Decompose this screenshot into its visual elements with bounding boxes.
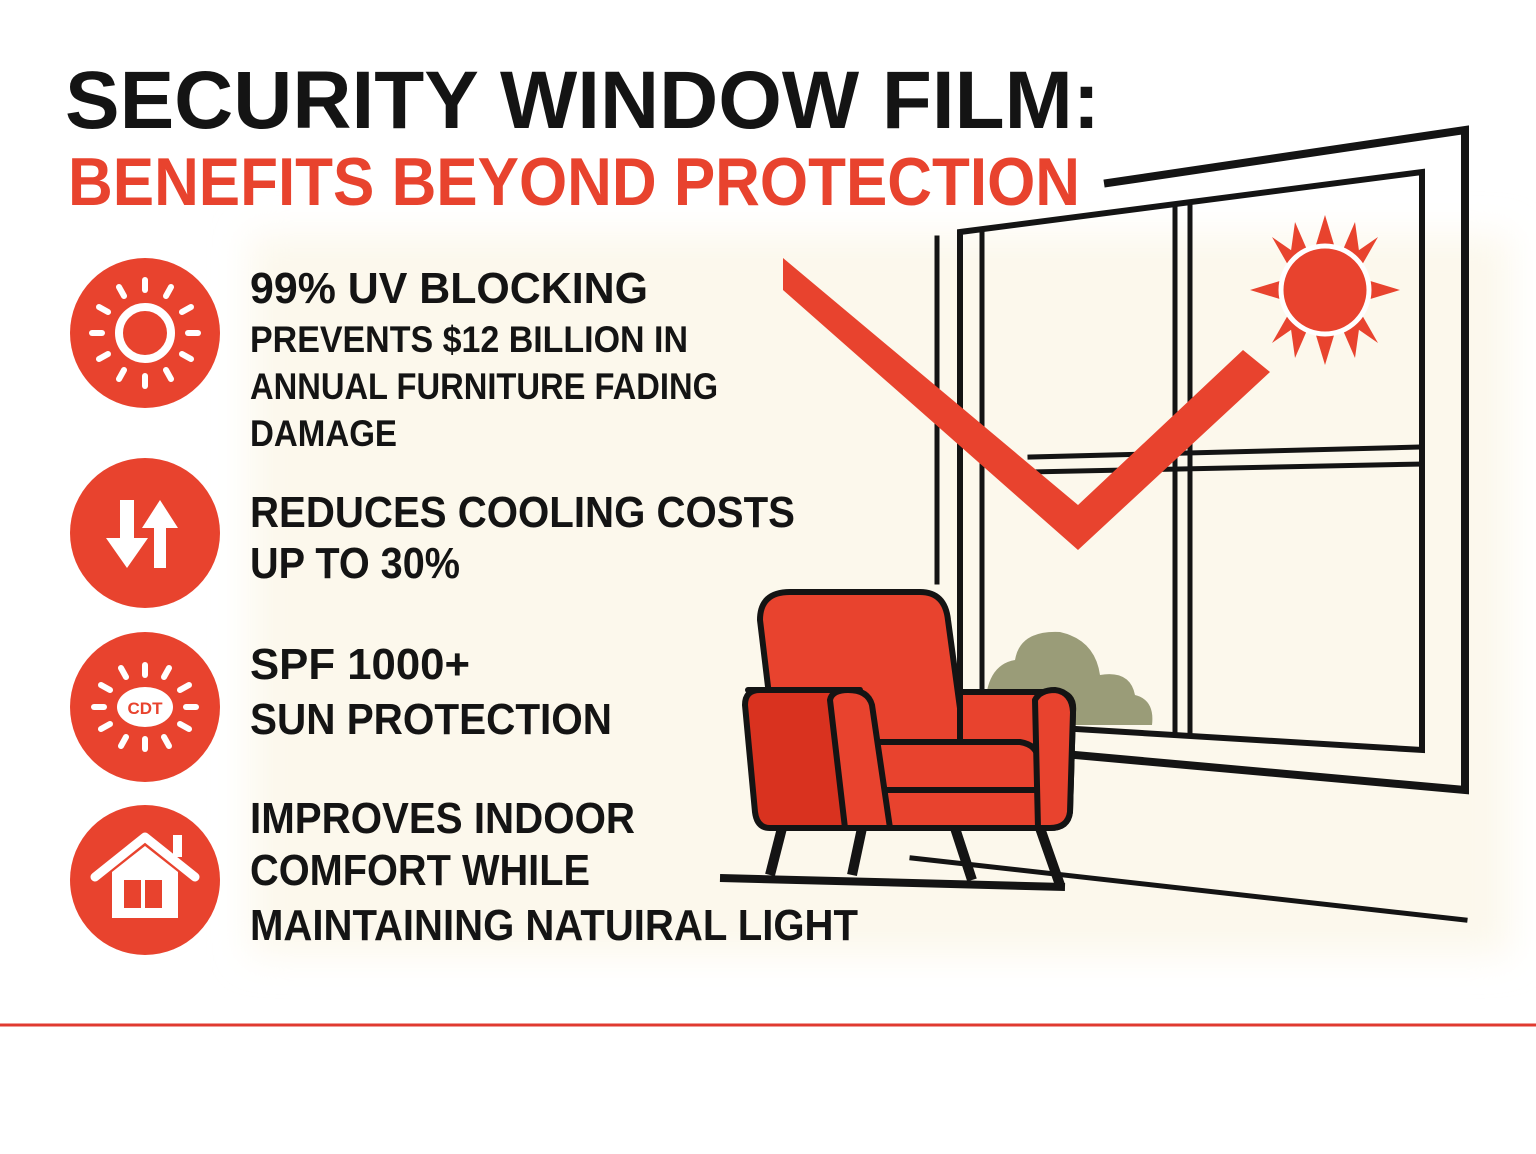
background cream panel (250, 235, 1510, 955)
text: SPF: SPF 1000+ (250, 640, 470, 689)
title: SECURITY WINDOW FILM: (65, 55, 1100, 146)
text: UV blocking: PREVENTS $12 BILLION IN (250, 319, 688, 360)
text: SPF (250, 640, 612, 744)
text: UV blocking: DAMAGE (250, 413, 397, 454)
title: BENEFITS BEYOND PROTECTION (68, 144, 1080, 220)
title (65, 55, 1100, 220)
icon: SPF sun: CDT (128, 699, 163, 718)
illustration: window (912, 130, 1465, 920)
icon: house (70, 805, 220, 955)
text: cooling: UP TO 30% (250, 539, 460, 588)
text: cooling: REDUCES COOLING COSTS (250, 488, 795, 537)
bottom red rule (0, 1024, 1536, 1026)
text: SPF: SUN PROTECTION (250, 695, 612, 744)
text: UV blocking (250, 264, 718, 454)
text: comfort (250, 794, 858, 950)
bush (985, 632, 1152, 725)
icon: arrows (70, 458, 220, 608)
icon: UV sun (70, 258, 220, 408)
red V arrow (783, 258, 1270, 550)
text: comfort: COMFORT WHILE (250, 846, 590, 895)
text: comfort: MAINTAINING NATUIRAL LIGHT (250, 901, 858, 950)
text: UV blocking: ANNUAL FURNITURE FADING (250, 366, 718, 407)
illustration: armchair (720, 592, 1073, 887)
text: UV blocking: 99% UV BLOCKING (250, 264, 648, 313)
icon: SPF sun (70, 632, 220, 782)
text: comfort: IMPROVES INDOOR (250, 794, 635, 843)
icon: sun in window (1250, 215, 1400, 365)
text: cooling (250, 488, 795, 588)
